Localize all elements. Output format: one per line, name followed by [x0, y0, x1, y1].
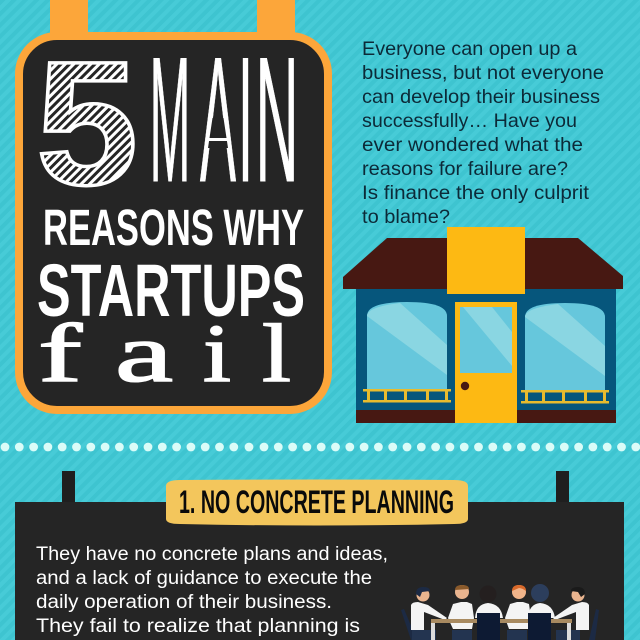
- heading: REASONS WHY: REASONS WHY: [43, 199, 304, 256]
- reason 1 heading label: 1. NO CONCRETE PLANNING: [179, 484, 454, 520]
- person 2: [448, 585, 474, 640]
- intro text block: business, but not everyone: [362, 62, 604, 84]
- meeting table: [431, 619, 572, 640]
- icon: team meeting around table: [401, 584, 599, 640]
- person 5: [528, 584, 555, 640]
- panel: reason 1 sign: [15, 471, 624, 640]
- heading: fail: f: [38, 307, 83, 399]
- intro text block: Everyone can open up a: [362, 38, 577, 60]
- heading: fail: i: [203, 307, 231, 399]
- sign straps: [50, 0, 295, 40]
- panel: title chalkboard sign: N: [256, 20, 298, 219]
- intro text block: reasons for failure are?: [362, 158, 568, 180]
- icon: storefront: [343, 227, 623, 423]
- right window: [525, 303, 605, 392]
- reason 1 text block: They fail to realize that planning is: [36, 616, 360, 637]
- heading number 5: 5: [36, 26, 138, 222]
- shop body: [356, 288, 616, 411]
- reason 1 text block: daily operation of their business.: [36, 592, 332, 613]
- heading: STARTUPS: STARTUPS: [37, 249, 305, 332]
- heading: fail: [38, 307, 291, 399]
- sign board: [19, 36, 328, 410]
- intro text block: [362, 38, 604, 228]
- person 3: [475, 586, 503, 640]
- shop base: [356, 410, 616, 423]
- heading: MAIN: M: [150, 20, 190, 219]
- heading: fail: l: [262, 307, 291, 399]
- left window rail: [363, 389, 451, 402]
- heading: MAIN: A: [200, 20, 236, 219]
- reason 1 text block: [36, 544, 388, 637]
- sign board: [15, 502, 624, 640]
- shop roof: [343, 238, 623, 289]
- intro text block: ever wondered what the: [362, 134, 583, 156]
- intro text block: to blame?: [362, 206, 450, 228]
- intro text block: Is finance the only culprit: [362, 182, 590, 204]
- reason 1 text block: and a lack of guidance to execute the: [36, 568, 372, 589]
- dotted divider: [1, 443, 640, 451]
- chairs: [401, 609, 599, 640]
- reason 1 text block: They have no concrete plans and ideas,: [36, 544, 388, 565]
- person 6: [553, 587, 589, 640]
- panel: title chalkboard sign: [19, 0, 328, 410]
- intro text block: can develop their business: [362, 86, 600, 108]
- reason 1 heading label: [166, 480, 468, 526]
- intro text block: successfully… Have you: [362, 110, 577, 132]
- shop sign: [447, 227, 525, 294]
- right window rail: [521, 390, 609, 404]
- heading: MAIN: I: [238, 20, 253, 219]
- person 1: [411, 587, 447, 640]
- left window: [367, 302, 447, 390]
- heading: fail: a: [115, 307, 173, 399]
- sign posts: [62, 471, 569, 505]
- person 4: [505, 585, 531, 640]
- shop door: [455, 302, 517, 423]
